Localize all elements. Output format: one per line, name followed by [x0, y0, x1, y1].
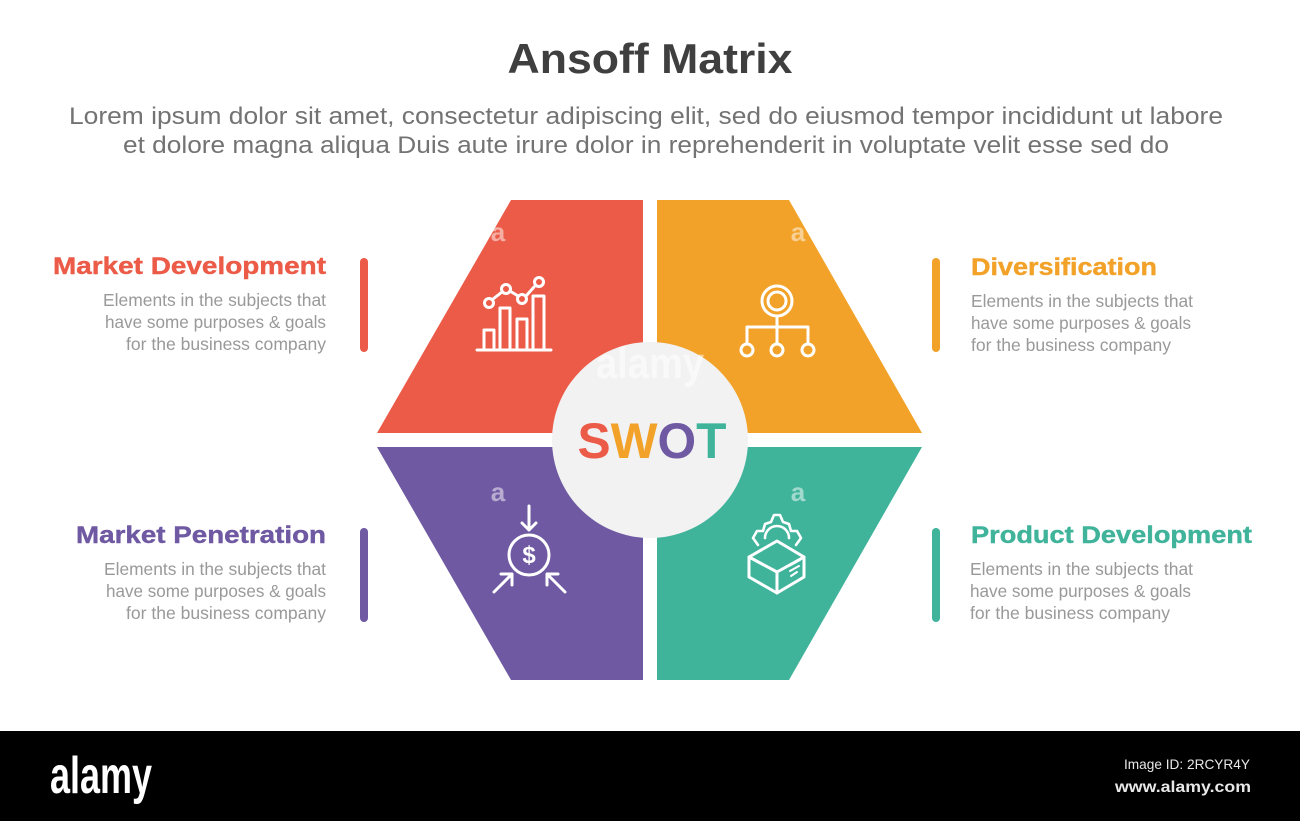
icon: hierarchy network	[741, 286, 814, 356]
panel: diversification quadrant	[657, 200, 922, 433]
text block: market development: Market Development	[53, 253, 326, 280]
text block: market development: for the business company	[126, 334, 326, 354]
SWOT label: SWOT	[578, 413, 726, 469]
watermark marks: a	[791, 217, 806, 247]
text block: market penetration: Market Penetration	[76, 522, 326, 549]
watermark marks	[491, 217, 806, 507]
subtitle text block: Lorem ipsum dolor sit amet, consectetur adipiscing elit, sed do eiusmod tempor incididunt ut labore	[69, 103, 1223, 130]
panel: market development quadrant	[377, 200, 643, 433]
text block: market development: Elements in the subjects that	[103, 290, 326, 310]
icon: dollar with inward arrows: $	[522, 542, 536, 569]
icon: bar chart with trend line	[477, 278, 551, 350]
text block: market penetration: for the business company	[126, 603, 326, 623]
text block: diversification: Elements in the subjects that	[971, 291, 1193, 311]
text block: product development: Product Development	[971, 522, 1252, 549]
subtitle text block: et dolore magna aliqua Duis aute irure dolor in reprehenderit in voluptate velit esse sed do	[123, 132, 1169, 159]
text block: market penetration: have some purposes & goals	[106, 581, 326, 601]
marker bar: product development	[932, 528, 940, 622]
text block: market penetration	[76, 522, 326, 623]
watermark marks: a	[791, 477, 806, 507]
title: Ansoff Matrix	[508, 35, 793, 82]
panel: hexagon matrix	[377, 200, 922, 680]
panel: product development quadrant	[657, 447, 922, 680]
text block: diversification: for the business company	[971, 335, 1171, 355]
text block: product development: have some purposes & goals	[970, 581, 1191, 601]
text block: diversification: Diversification	[971, 254, 1157, 281]
watermark marks: alamy	[596, 339, 704, 388]
icon: dollar with inward arrows	[494, 506, 565, 592]
panel: market penetration quadrant	[377, 447, 643, 680]
marker bar: market development	[360, 258, 368, 352]
footer logo: alamy	[50, 747, 152, 805]
text block: product development: Elements in the subjects that	[970, 559, 1193, 579]
icon: box with gear	[749, 515, 804, 593]
text block: market development: have some purposes & goals	[105, 312, 326, 332]
image id: Image ID: 2RCYR4Y	[1124, 756, 1251, 772]
watermark marks: a	[491, 217, 506, 247]
text block: product development	[970, 522, 1252, 623]
text block: market penetration: Elements in the subjects that	[104, 559, 326, 579]
marker bar: diversification	[932, 258, 940, 352]
text block: market development	[53, 253, 326, 354]
center circle	[552, 342, 748, 538]
footer band	[0, 731, 1300, 821]
marker bar: market penetration	[360, 528, 368, 622]
watermark marks: a	[491, 477, 506, 507]
text block: diversification: have some purposes & goals	[971, 313, 1191, 333]
subtitle text block	[69, 103, 1223, 159]
text block: product development: for the business company	[970, 603, 1170, 623]
text block: diversification	[971, 254, 1193, 355]
website: www.alamy.com	[1114, 779, 1251, 796]
